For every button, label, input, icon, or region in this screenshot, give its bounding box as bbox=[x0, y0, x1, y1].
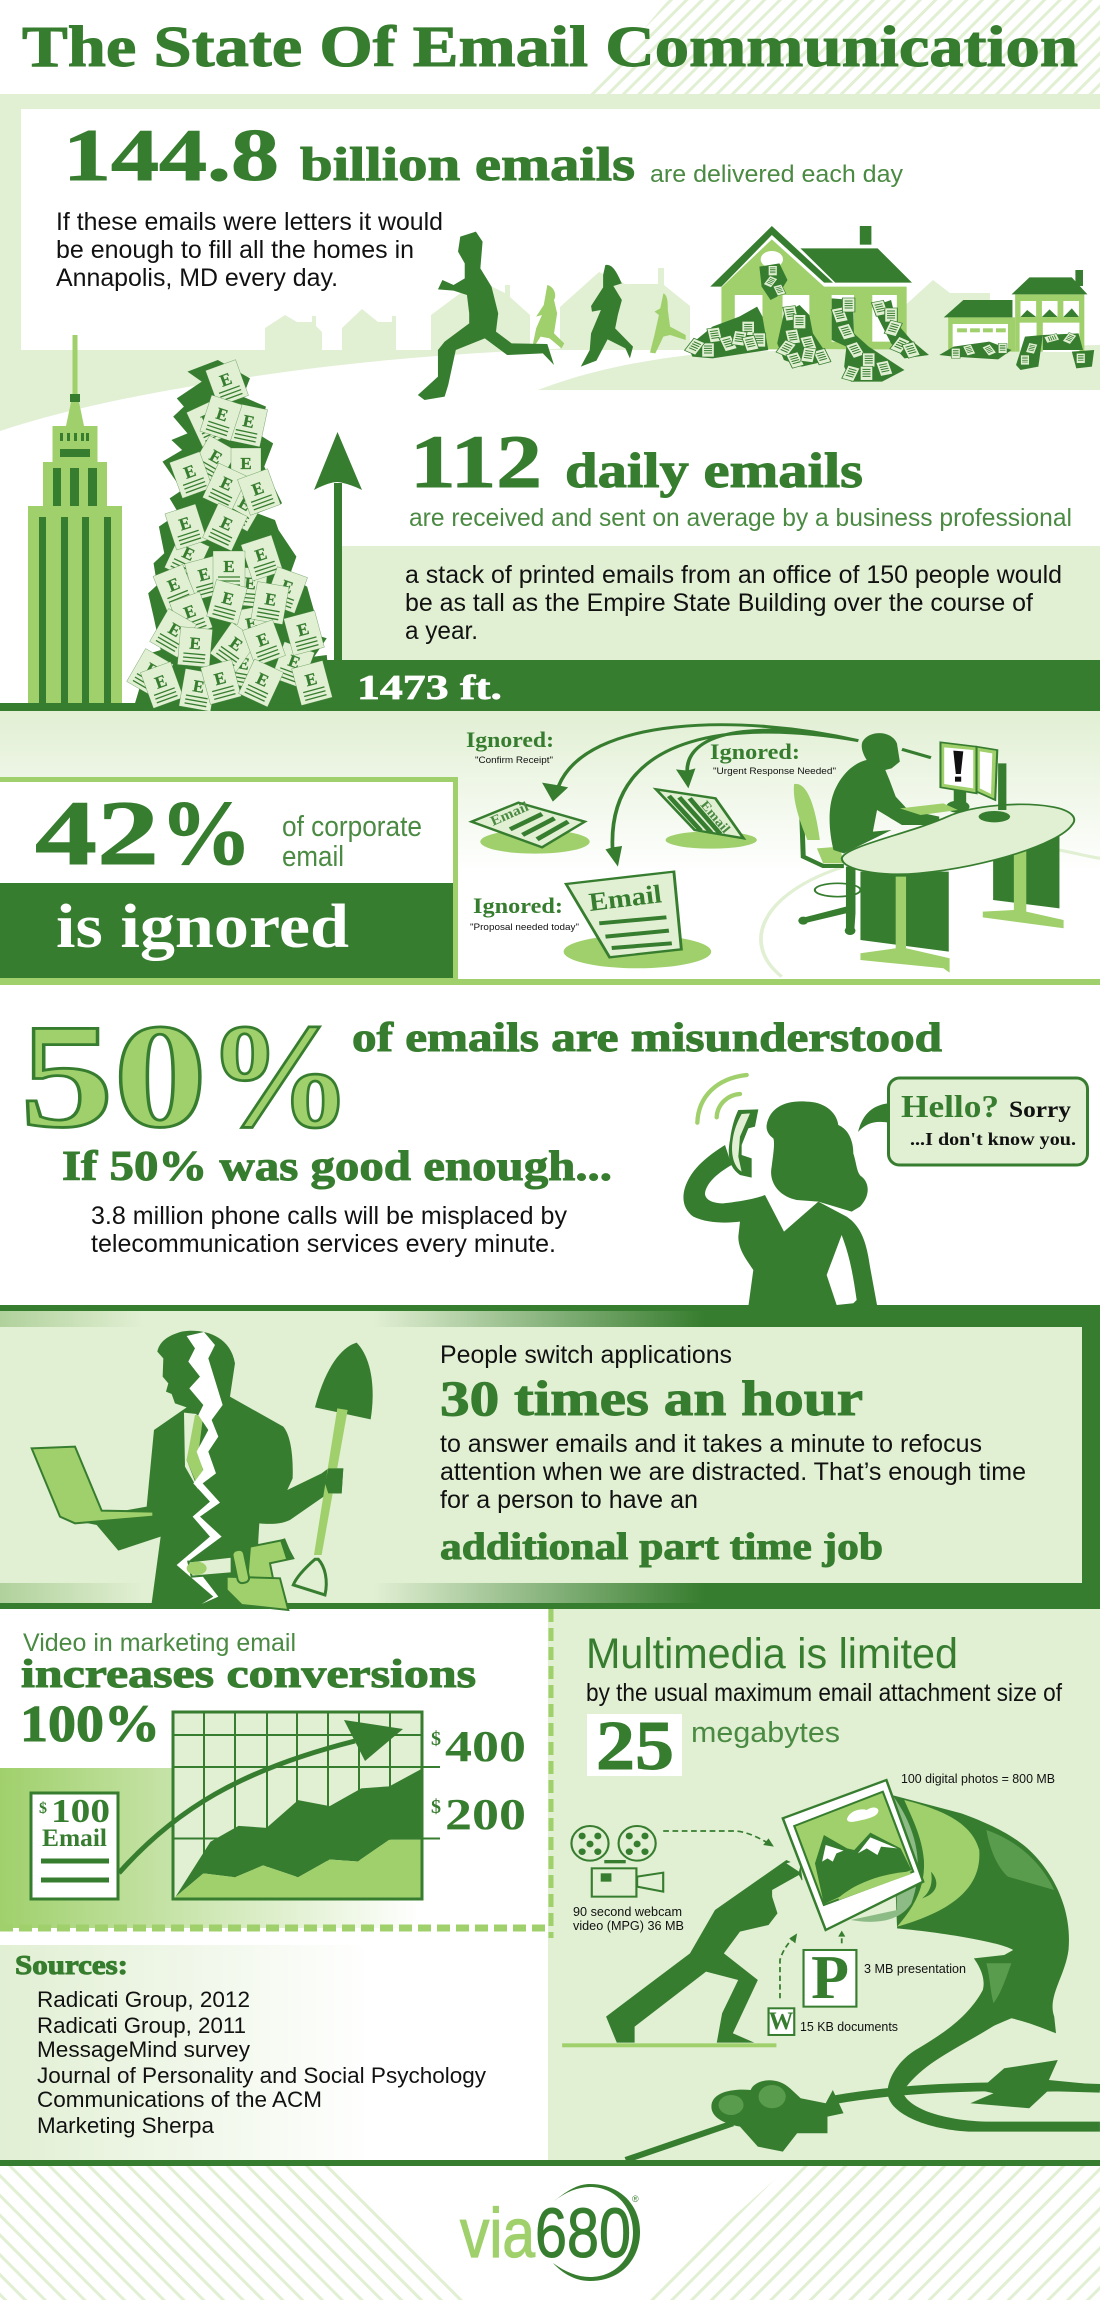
label: digital photos: 100 digital photos = 800 MB bbox=[901, 1771, 1055, 1786]
illustration: stack of printed emails: E bbox=[142, 659, 161, 681]
photo frame bbox=[783, 1780, 923, 1930]
top header stripes bbox=[590, 0, 1100, 94]
illustration: stack of printed emails: E bbox=[217, 473, 236, 495]
illustration: stack of printed emails: E bbox=[254, 629, 271, 651]
illustration: stack of printed emails: E bbox=[249, 478, 266, 500]
illustration: stack of printed emails: E bbox=[253, 544, 269, 565]
illustration: split man with laptop and shovel bbox=[32, 1331, 373, 1610]
chair bbox=[794, 784, 860, 935]
body text: Annapolis bbox=[56, 208, 443, 292]
illustration: runners bbox=[418, 232, 686, 400]
stat: 100%: 100% bbox=[20, 1696, 160, 1753]
footer rule bbox=[0, 2160, 1100, 2166]
illustration: stack of printed emails: E bbox=[165, 619, 184, 641]
illustration: stack of printed emails: E bbox=[181, 461, 198, 483]
illustration: stack of printed emails: E bbox=[214, 404, 230, 425]
arrows from person to ignored emails bbox=[542, 725, 858, 867]
plug bbox=[711, 2080, 844, 2152]
email card: $100: Email bbox=[42, 1825, 107, 1852]
speech bubble bbox=[858, 1078, 1088, 1165]
illustration: stack of printed emails: E bbox=[241, 411, 256, 432]
callout: urgent response bbox=[710, 739, 836, 777]
headline: billion emails: billion emails bbox=[300, 138, 635, 191]
axis label: $400: 400 bbox=[445, 1722, 526, 1771]
runner: large foreground bbox=[418, 232, 554, 400]
icon letter: W: W bbox=[768, 2008, 794, 2035]
title: The State Of Email Communication bbox=[22, 14, 1078, 79]
email card: $100: 100 bbox=[51, 1793, 110, 1830]
paper: urgent response bbox=[656, 789, 757, 849]
panel: sources bbox=[0, 1945, 486, 2160]
heading: good enough: If 50% was good enough... bbox=[62, 1144, 612, 1190]
body text: Annapolis: Annapolis, MD every day. bbox=[56, 264, 338, 292]
illustration: stack of printed emails: E bbox=[240, 454, 252, 473]
body text: Annapolis: If these emails were letters it would bbox=[56, 208, 443, 236]
body text: stack of printed emails: a year. bbox=[405, 617, 478, 645]
body text: Annapolis: be enough to fill all the homes in bbox=[56, 236, 414, 264]
callout: proposal needed bbox=[470, 893, 579, 933]
illustration: stack of printed emails: E bbox=[152, 671, 169, 693]
illustration: stack of printed emails: E bbox=[279, 576, 296, 598]
callout: proposal needed: "Proposal needed today" bbox=[470, 922, 579, 933]
illustration: stack of printed emails: E bbox=[263, 589, 278, 610]
dashed dividers bbox=[0, 1609, 551, 1938]
email piles bbox=[688, 307, 768, 358]
stat: 25 megabytes: megabytes bbox=[691, 1717, 840, 1749]
body text: stack of printed emails bbox=[405, 561, 1062, 645]
logo: via680 bbox=[460, 2184, 640, 2281]
desk top bbox=[842, 804, 1074, 874]
illustration: stack of printed emails: E bbox=[212, 668, 228, 689]
axis label: $400 bbox=[431, 1722, 526, 1771]
paper label: Email 1: Email bbox=[489, 800, 531, 830]
pushing man bbox=[606, 1860, 802, 2043]
label: webcam video bbox=[573, 1904, 684, 1933]
callout: confirm receipt: Ignored: bbox=[466, 727, 554, 752]
speech bubble: Hello? bbox=[901, 1088, 999, 1124]
paper label: Email 2: Email bbox=[698, 797, 734, 836]
callout: proposal needed: Ignored: bbox=[473, 893, 563, 918]
callout: urgent response: Ignored: bbox=[710, 739, 800, 764]
label: of corporate email bbox=[282, 811, 422, 873]
body text: phone calls bbox=[91, 1202, 567, 1258]
stat: 25 megabytes bbox=[587, 1708, 840, 1785]
runner: dark woman bbox=[581, 265, 633, 367]
heading: increases conversions: increases conversions bbox=[21, 1651, 476, 1696]
headline: 144.8: 144.8 bbox=[63, 115, 279, 197]
heading: 30 times an hour: 30 times an hour bbox=[440, 1370, 863, 1426]
heading: sources: Sources: bbox=[15, 1950, 128, 1980]
callout: confirm receipt bbox=[466, 727, 554, 766]
body text: phone calls: 3.8 million phone calls will be misplaced by bbox=[91, 1202, 567, 1230]
heading: misunderstood: of emails are misunderstood bbox=[352, 1014, 942, 1060]
logo: via680: via bbox=[460, 2194, 535, 2272]
logo: via680: 680 bbox=[535, 2194, 631, 2272]
stat: 25 megabytes: 25 bbox=[596, 1708, 674, 1785]
illustration: stack of printed emails: E bbox=[244, 574, 257, 593]
paper: proposal bbox=[564, 872, 711, 968]
illustration: stack of printed emails: E bbox=[235, 493, 254, 515]
heading: multimedia is limited: Multimedia is limited bbox=[586, 1630, 958, 1678]
ground bar bbox=[0, 660, 1100, 711]
illustration: stack of printed emails: E bbox=[217, 513, 236, 535]
illustration: ignored emails scene bbox=[472, 725, 1100, 977]
film camera bbox=[571, 1826, 663, 1897]
stat: 50%: % bbox=[207, 994, 352, 1159]
illustration: stack of printed emails: E bbox=[196, 564, 212, 585]
body text: phone calls: telecommunication services every minute. bbox=[91, 1230, 556, 1258]
illustration: stack of printed emails: E bbox=[181, 601, 198, 623]
illustration: stack of printed emails: E bbox=[244, 613, 259, 634]
list: sources: MessageMind survey bbox=[37, 2037, 250, 2062]
right light panel bbox=[342, 546, 1100, 660]
axis label: $200 bbox=[431, 1790, 526, 1839]
panel: multimedia background bbox=[548, 1609, 1100, 2160]
body text: stack of printed emails: be as tall as the Empire State Building over the course of bbox=[405, 589, 1033, 617]
P and W boxes bbox=[804, 1950, 856, 2007]
illustration: stack of printed emails: E bbox=[236, 653, 251, 674]
heading: part time job: additional part time job bbox=[440, 1526, 883, 1568]
line chart bbox=[119, 1712, 440, 1899]
swoosh under top panel bbox=[0, 346, 620, 431]
pipe tail bbox=[896, 2007, 1008, 2087]
paper label: Email 3: Email bbox=[587, 879, 663, 917]
body text: stack of printed emails: a stack of printed emails from an office of 150 people would bbox=[405, 561, 1062, 589]
label: of corporate email: of corporate bbox=[282, 811, 422, 843]
panel: 144.8 billion emails bbox=[0, 94, 1100, 431]
panel: video in marketing email bbox=[0, 1629, 526, 1928]
stat: 50% bbox=[20, 994, 352, 1159]
illustration: stack of printed emails: E bbox=[303, 669, 319, 690]
icon letter: P: P bbox=[811, 1944, 849, 2012]
stat: 42%: 42 bbox=[35, 782, 159, 884]
paper: confirm receipt bbox=[472, 803, 590, 854]
list: sources: Radicati Group, 2012 bbox=[37, 1987, 250, 2012]
label: webcam video: 90 second webcam bbox=[573, 1904, 682, 1919]
illustration: Empire State Building bbox=[28, 335, 122, 703]
illustration: woman on phone bbox=[683, 1075, 877, 1307]
body text: refocus: for a person to have an bbox=[440, 1486, 698, 1514]
stat: 50%: 50 bbox=[20, 994, 207, 1159]
label: documents: 15 KB documents bbox=[800, 2019, 898, 2034]
illustration: stack of printed emails: E bbox=[295, 619, 311, 640]
email card: $100 bbox=[31, 1793, 118, 1899]
illustration: stack of printed emails: E bbox=[286, 651, 303, 673]
intro text: video: Video in marketing email bbox=[23, 1629, 296, 1657]
illustration: stack of printed emails: E bbox=[206, 446, 225, 468]
sub headline: business professional: are received and sent on average by a business professional bbox=[409, 504, 1072, 532]
illustration: stack of printed emails: E bbox=[165, 574, 183, 596]
logo: via680: ® bbox=[632, 2194, 639, 2204]
cable loop bbox=[833, 2087, 1100, 2100]
monitor with alert bbox=[900, 742, 1010, 822]
illustration: stack of printed emails: E bbox=[198, 409, 217, 431]
list: sources: Radicati Group, 2011 bbox=[37, 2013, 246, 2038]
sub headline: are delivered each day bbox=[650, 161, 903, 188]
desk bbox=[860, 835, 1064, 973]
body text: people switch: People switch applications bbox=[440, 1341, 732, 1369]
headline: 112: 112 bbox=[410, 421, 542, 504]
list: sources: Journal of Personality and Social Psychology bbox=[37, 2063, 486, 2088]
axis label: $400: $ bbox=[431, 1728, 441, 1750]
speech bubble: ...I don't know you. bbox=[910, 1129, 1076, 1149]
illustration: pushing media into email pipe bbox=[562, 1780, 1100, 2160]
body text: attachment size: by the usual maximum email attachment size of bbox=[586, 1679, 1062, 1707]
illustration: main house overflowing with emails bbox=[685, 226, 929, 382]
list: sources bbox=[37, 1987, 486, 2138]
body text: refocus: attention when we are distracted. That’s enough time bbox=[440, 1458, 1026, 1486]
label: of corporate email: email bbox=[282, 841, 344, 873]
illustration: stack of printed emails: E bbox=[220, 588, 236, 609]
label: webcam video: video (MPG) 36 MB bbox=[573, 1918, 684, 1933]
runner: light back bbox=[533, 285, 564, 348]
email card: $100: $ bbox=[39, 1800, 47, 1817]
illustration: stack of printed emails: E bbox=[217, 369, 234, 391]
list: sources: Communications of the ACM bbox=[37, 2087, 322, 2112]
illustration: stack of printed emails: E bbox=[223, 557, 235, 576]
panel: 30 times an hour bbox=[0, 1305, 1100, 1609]
illustration: stack of printed emails bbox=[127, 360, 334, 711]
illustration: stack of printed emails: E bbox=[177, 513, 193, 534]
illustration: stack of printed emails: E bbox=[253, 669, 272, 691]
footer stripes bbox=[0, 2166, 1100, 2300]
list: sources: Marketing Sherpa bbox=[37, 2113, 215, 2138]
illustration: stack of printed emails: E bbox=[179, 543, 198, 565]
body text: refocus bbox=[440, 1430, 1026, 1514]
arrow: height bbox=[314, 432, 362, 663]
headline: daily emails: daily emails bbox=[565, 442, 863, 498]
illustration: stack of printed emails: E bbox=[226, 633, 246, 655]
illustration: second house with emails bbox=[939, 270, 1094, 370]
stat: 42% bbox=[35, 782, 252, 884]
body text: refocus: to answer emails and it takes a minute to refocus bbox=[440, 1430, 982, 1458]
pipe body and cable bbox=[888, 1795, 1100, 2132]
panel: 42% ignored bbox=[0, 711, 1100, 985]
runner: light far bbox=[650, 293, 686, 353]
label: 1473 ft.: 1473 ft. bbox=[357, 668, 502, 707]
callout: urgent response: "Urgent Response Needed" bbox=[713, 766, 836, 777]
callout: confirm receipt: "Confirm Receipt" bbox=[475, 755, 553, 766]
person at desk bbox=[830, 733, 939, 853]
speech bubble: Sorry bbox=[1009, 1097, 1072, 1122]
green hill bbox=[538, 345, 1100, 390]
label: is ignored: is ignored bbox=[56, 893, 349, 961]
stat: 42%: % bbox=[160, 782, 252, 884]
illustration: stack of printed emails: E bbox=[189, 634, 202, 653]
illustration: stack of printed emails: E bbox=[191, 676, 206, 697]
axis label: $200: 200 bbox=[445, 1790, 526, 1839]
label: presentation: 3 MB presentation bbox=[864, 1961, 966, 1976]
axis label: $200: $ bbox=[431, 1796, 441, 1818]
dashed arrows bbox=[663, 1831, 842, 1998]
background neighbourhood silhouettes bbox=[265, 268, 1000, 350]
